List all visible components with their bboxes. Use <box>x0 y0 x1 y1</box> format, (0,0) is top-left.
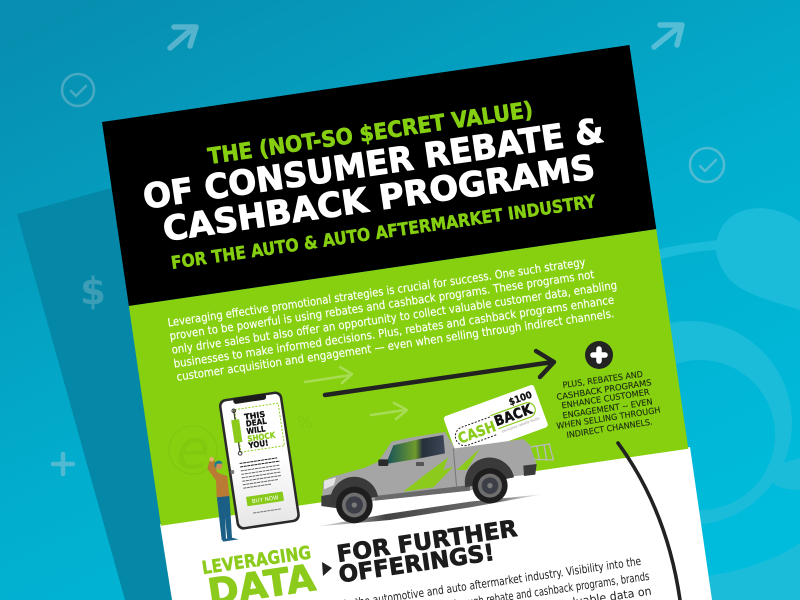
phone body <box>218 391 301 531</box>
icon: arrow top right <box>654 25 682 47</box>
cashback card <box>443 384 549 459</box>
callout text: PLUS, REBATES AND <box>562 369 643 390</box>
heading: for further offerings <box>334 516 522 588</box>
card fine print: exclusive rebate deals <box>501 416 540 434</box>
person raised hand <box>209 457 214 462</box>
truck <box>317 432 553 527</box>
card back label: BACK <box>492 401 535 430</box>
card oval dashed <box>453 417 496 448</box>
phone copy lines <box>240 458 283 488</box>
card body <box>443 384 549 459</box>
truck rear bumper <box>523 464 537 476</box>
title line 2: OF CONSUMER REBATE & <box>140 111 606 218</box>
truck window <box>386 435 445 464</box>
truck mirror <box>378 459 388 466</box>
intro text <box>167 251 622 384</box>
watermark icons: % <box>297 413 313 433</box>
phone screen <box>221 393 298 528</box>
curved connector line <box>618 443 680 600</box>
panel: intro green <box>129 229 688 526</box>
phone headline: SHOCK <box>247 431 277 444</box>
phone headline: THIS <box>244 410 266 422</box>
intro text: customer acquisition and engagement — even when selling through indirect channels. <box>176 306 615 384</box>
person other hand <box>230 470 234 474</box>
title line 3: CASHBACK PROGRAMS <box>160 148 598 250</box>
callout text: ENHANCE CUSTOMER <box>561 387 650 410</box>
person head <box>214 461 223 470</box>
front wheel arch <box>330 477 378 505</box>
callout text: ENGAGEMENT -- EVEN <box>562 396 653 420</box>
heading: leveraging data: LEVERAGING <box>201 542 312 579</box>
heading: for further offerings: FOR FURTHER <box>335 516 519 568</box>
icon: plus circle <box>585 341 613 369</box>
panel: page white <box>160 447 712 600</box>
callout text: CASHBACK PROGRAMS <box>556 377 652 402</box>
icon: plus <box>53 454 73 474</box>
back sheet shadow <box>17 187 190 600</box>
phone headline: YOU! <box>247 438 269 450</box>
intro text: proven to be powerful is using rebates and cashback programs. These programs not <box>169 267 596 343</box>
front wheel <box>336 487 373 523</box>
heading: for further offerings: OFFERINGS! <box>337 540 496 588</box>
intro text: only drive sales but also offer an opportunity to collect valuable customer data, enabling <box>171 278 618 357</box>
person legs <box>217 494 239 542</box>
title line 1: THE (NOT-SO $ECRET VALUE) <box>206 98 535 170</box>
watermark icons <box>169 413 313 481</box>
phone notch <box>233 393 266 404</box>
phone headline: DEAL <box>245 417 267 429</box>
truck shadow <box>317 494 545 527</box>
truck front bumper <box>321 493 338 508</box>
card amount: $100 <box>507 390 534 408</box>
panel: header black <box>102 45 656 306</box>
arrow: light two <box>371 403 407 419</box>
phone headline <box>243 409 278 450</box>
truck headlight <box>324 477 336 489</box>
arrow: light one <box>305 367 352 383</box>
truck graphics stripes <box>403 448 480 492</box>
page <box>102 45 709 600</box>
icon: arrow top left <box>170 27 196 48</box>
truck body <box>322 432 537 505</box>
callout text <box>556 369 661 440</box>
intro text: Leveraging effective promotional strategies is crucial for success. One such strategy <box>167 255 586 330</box>
icon: check left <box>62 74 94 106</box>
logo shapes right <box>588 208 800 600</box>
truck rack <box>528 444 553 460</box>
phone button <box>246 491 284 506</box>
arrow: big black <box>325 351 554 395</box>
phone headline: WILL <box>246 424 266 436</box>
phone button: BUY NOW <box>252 495 280 505</box>
coupon dashed box <box>235 403 284 452</box>
person torso and arm <box>207 459 229 497</box>
phone footer line <box>253 509 281 513</box>
callout text: WHEN SELLING THROUGH <box>556 405 661 431</box>
phone <box>218 391 301 531</box>
card cash label: CASH <box>456 419 498 447</box>
truck door line <box>453 448 457 487</box>
shock absorber <box>230 408 244 456</box>
callout text: INDIRECT CHANNELS. <box>566 416 653 440</box>
rear wheel arch <box>465 457 514 487</box>
title <box>137 88 615 276</box>
title line 4: FOR THE AUTO & AUTO AFTERMARKET INDUSTRY <box>170 192 597 274</box>
rear wheel <box>472 468 508 503</box>
person <box>207 457 239 542</box>
icon: check right <box>690 148 724 182</box>
icon: dollar: $ <box>80 270 106 313</box>
truck handle <box>416 462 424 466</box>
watermark icons: e <box>176 418 210 481</box>
triangle marker <box>322 562 332 576</box>
intro text: businesses to make informed decisions. Plus, rebates and cashback programs enhance <box>173 293 615 371</box>
truck lower sill <box>375 485 470 501</box>
card oval green <box>490 400 537 430</box>
